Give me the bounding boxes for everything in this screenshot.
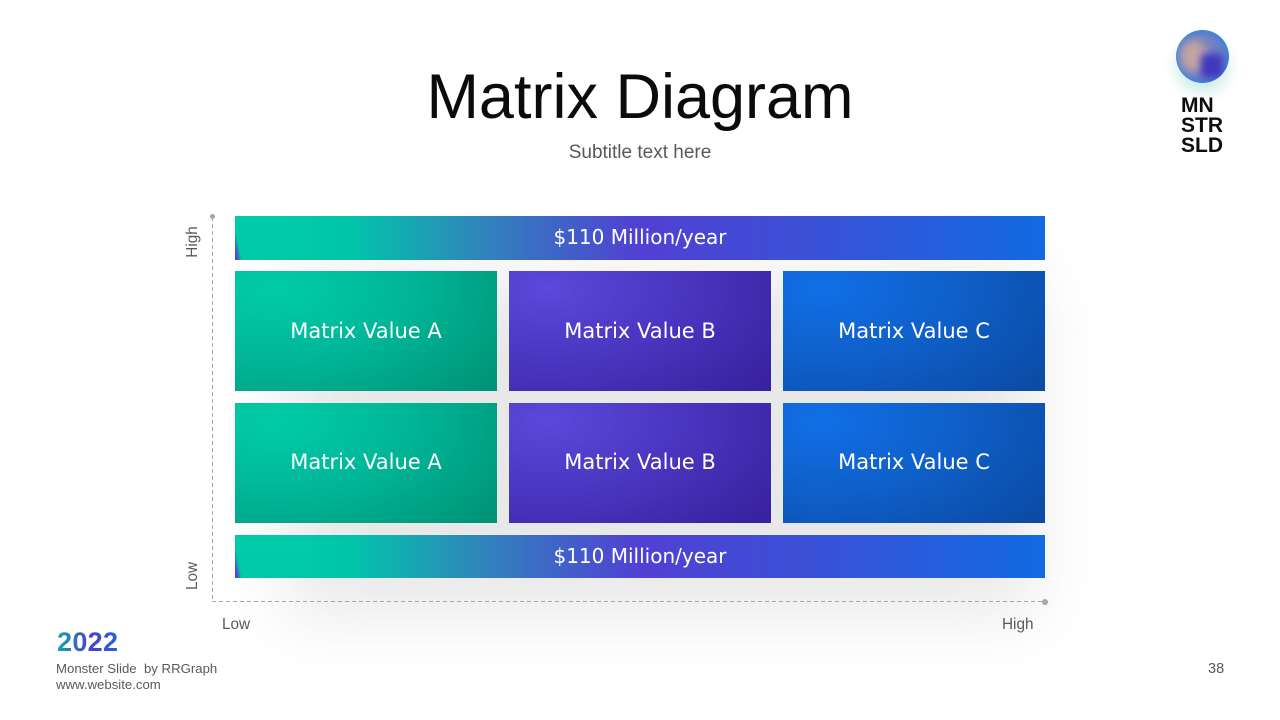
bottom bar: $110 Million/year	[553, 544, 726, 568]
x axis label: High: High	[1002, 616, 1033, 633]
logo text: MN	[1181, 94, 1214, 117]
cell: row 2 B	[509, 403, 771, 523]
cell: row 1 A: Matrix Value A	[290, 319, 442, 343]
footer text: www.website.com	[56, 677, 161, 692]
y axis	[210, 214, 215, 599]
footer text	[56, 661, 217, 692]
top bar	[235, 216, 1045, 260]
cell: row 2 A	[235, 403, 497, 523]
footer text: Monster Slide by RRGraph	[56, 661, 217, 676]
logo text	[1181, 94, 1223, 157]
logo text: SLD	[1181, 134, 1223, 157]
x axis	[212, 599, 1048, 605]
cell: row 1 C	[783, 271, 1045, 391]
top bar: $110 Million/year	[553, 225, 726, 249]
title: Matrix Diagram	[426, 62, 854, 132]
page number: 38	[1208, 661, 1224, 677]
bottom bar	[235, 535, 1045, 578]
footer year: 2022	[57, 627, 118, 657]
y axis label: Low: Low	[184, 562, 201, 590]
cell: row 1 B	[509, 271, 771, 391]
subtitle: Subtitle text here	[569, 142, 711, 163]
logo text: STR	[1181, 114, 1223, 137]
logo	[1170, 30, 1234, 157]
cell: row 2 C: Matrix Value C	[838, 450, 990, 474]
cell: row 2 B: Matrix Value B	[564, 450, 716, 474]
cell: row 1 C: Matrix Value C	[838, 319, 990, 343]
y axis label: High: High	[184, 226, 201, 258]
cell: row 2 A: Matrix Value A	[290, 450, 442, 474]
soft shadow behind matrix	[285, 275, 1035, 615]
cell: row 1 A	[235, 271, 497, 391]
cell: row 1 B: Matrix Value B	[564, 319, 716, 343]
icon: gradient sphere	[1176, 30, 1229, 83]
x axis label: Low: Low	[222, 616, 250, 633]
cell: row 2 C	[783, 403, 1045, 523]
